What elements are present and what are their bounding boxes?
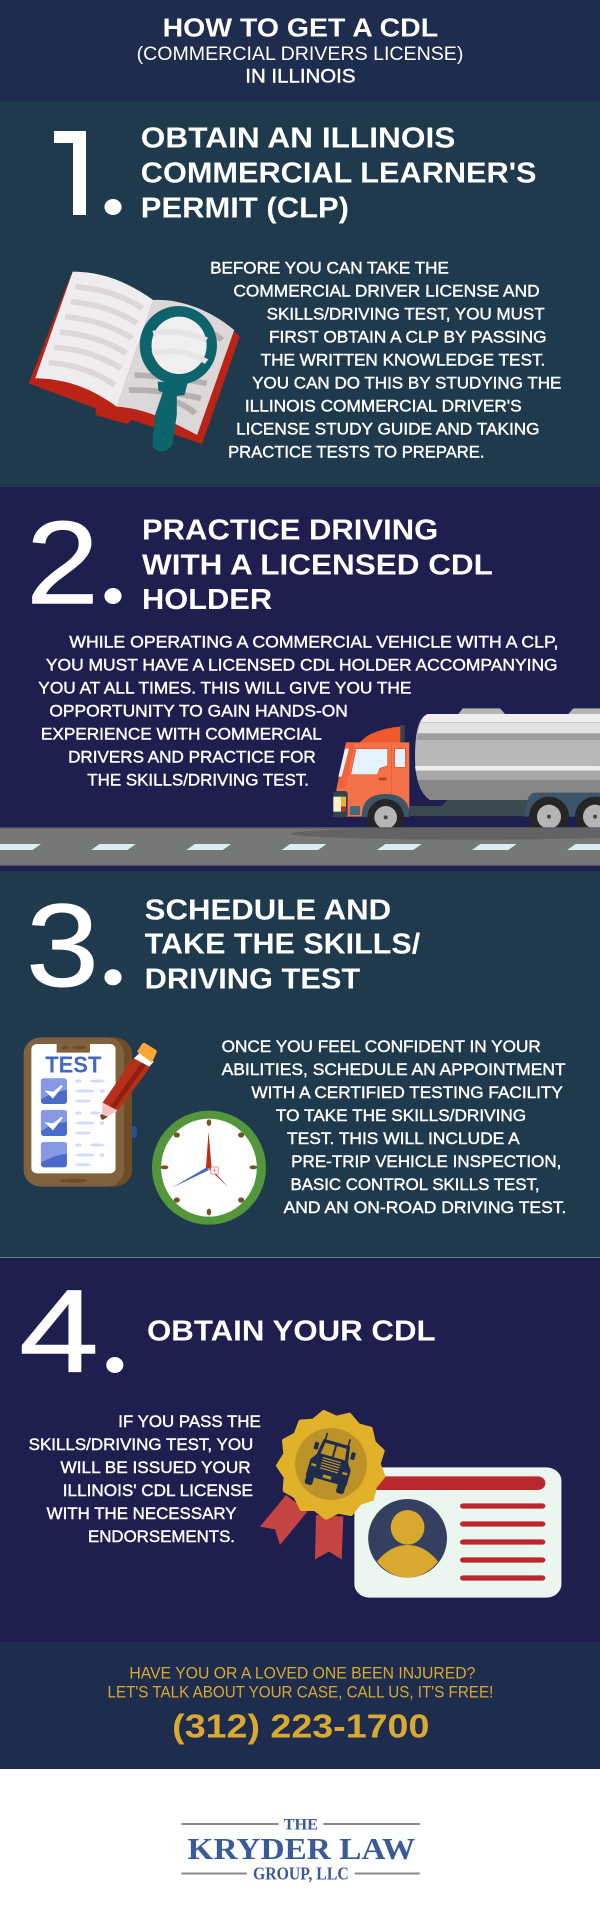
- step 2 body text: [38, 634, 558, 790]
- step 2 heading: PRACTICE DRIVING: [142, 514, 438, 546]
- step 4 body text: ENDORSEMENTS.: [88, 1528, 235, 1546]
- step 1 body text: LICENSE STUDY GUIDE AND TAKING: [236, 420, 540, 438]
- step 1 heading: [141, 123, 537, 224]
- clipboard label: TEST: [45, 1052, 101, 1078]
- step 2 body text: THE SKILLS/DRIVING TEST.: [87, 772, 309, 790]
- step 3 body text: ONCE YOU FEEL CONFIDENT IN YOUR: [222, 1038, 541, 1056]
- step 3 body text: AND AN ON-ROAD DRIVING TEST.: [284, 1199, 566, 1217]
- step 1 body text: FIRST OBTAIN A CLP BY PASSING: [269, 328, 546, 346]
- step 1 body text: ILLINOIS COMMERCIAL DRIVER'S: [245, 397, 522, 415]
- step 2 body text: YOU MUST HAVE A LICENSED CDL HOLDER ACCOMPANYING: [46, 657, 558, 675]
- step 4 body text: WITH THE NECESSARY: [47, 1505, 237, 1523]
- icon: license card: [354, 1467, 561, 1598]
- step 3 heading: [145, 894, 420, 995]
- step 4 body text: SKILLS/DRIVING TEST, YOU: [29, 1436, 253, 1454]
- call to action text: [108, 1664, 493, 1701]
- step 1 body text: SKILLS/DRIVING TEST, YOU MUST: [267, 305, 545, 323]
- step 2 heading: [142, 514, 493, 616]
- panel: step 4: [0, 1258, 600, 1642]
- step 1 heading: COMMERCIAL LEARNER'S: [141, 157, 537, 189]
- step number 1: [54, 131, 86, 215]
- logo: The Kryder Law Group: KRYDER LAW: [188, 1831, 415, 1866]
- step number 4: 4: [19, 1266, 99, 1398]
- step 2 heading: WITH A LICENSED CDL: [142, 549, 493, 581]
- phone number: (312) 223-1700: [172, 1707, 429, 1744]
- panel: call to action: [0, 1642, 600, 1769]
- panel: step 3: [0, 871, 600, 1258]
- step 3 body text: TEST. THIS WILL INCLUDE A: [287, 1130, 520, 1148]
- step 4 body text: IF YOU PASS THE: [118, 1413, 261, 1431]
- call to action text: HAVE YOU OR A LOVED ONE BEEN INJURED?: [129, 1664, 475, 1682]
- step number 2: 2: [26, 497, 99, 629]
- step 3 heading: DRIVING TEST: [145, 963, 361, 995]
- logo: The Kryder Law Group: [181, 1816, 420, 1883]
- icon: open book with magnifying glass: [29, 272, 240, 452]
- step 3 body text: ABILITIES, SCHEDULE AN APPOINTMENT: [222, 1061, 566, 1079]
- icon: award seal with truck: [260, 1412, 383, 1559]
- step 1 body text: BEFORE YOU CAN TAKE THE: [210, 259, 449, 277]
- step 1 body text: PRACTICE TESTS TO PREPARE.: [228, 443, 484, 461]
- step 3 heading: SCHEDULE AND: [145, 894, 391, 926]
- step 2 body text: DRIVERS AND PRACTICE FOR: [68, 749, 316, 767]
- step 1 heading: OBTAIN AN ILLINOIS: [141, 123, 455, 155]
- step 1 body text: THE WRITTEN KNOWLEDGE TEST.: [261, 351, 545, 369]
- step 2 heading: HOLDER: [142, 584, 272, 616]
- step number 3: 3: [26, 880, 99, 1012]
- panel: step 1: [0, 101, 600, 487]
- number dot: [104, 969, 122, 985]
- step 3 body text: WITH A CERTIFIED TESTING FACILITY: [251, 1084, 563, 1102]
- logo: The Kryder Law Group: THE: [284, 1816, 318, 1833]
- number dot: [104, 199, 122, 215]
- title: HOW TO GET A CDL: [163, 13, 438, 43]
- step 1 body text: YOU CAN DO THIS BY STUDYING THE: [252, 374, 561, 392]
- step 3 heading: TAKE THE SKILLS/: [145, 928, 420, 960]
- step 4 heading: OBTAIN YOUR CDL: [147, 1315, 436, 1347]
- icon: tanker truck: [333, 708, 600, 837]
- step 2 body text: OPPORTUNITY TO GAIN HANDS-ON: [49, 703, 348, 721]
- step 2 body text: YOU AT ALL TIMES. THIS WILL GIVE YOU THE: [38, 680, 411, 698]
- step 1 body text: [210, 259, 561, 461]
- step number 1: 1: [40, 109, 120, 241]
- step 2 body text: EXPERIENCE WITH COMMERCIAL: [41, 726, 322, 744]
- step 4 body text: [29, 1413, 261, 1546]
- panel: header: [0, 0, 600, 101]
- number dot: [106, 1357, 123, 1373]
- icon: test clipboard with pencil: [24, 1037, 157, 1187]
- step 2 body text: WHILE OPERATING A COMMERCIAL VEHICLE WITH A CLP,: [69, 634, 558, 652]
- step 1 heading: PERMIT (CLP): [141, 192, 349, 224]
- road: [0, 827, 600, 866]
- step 3 body text: PRE-TRIP VEHICLE INSPECTION,: [291, 1153, 561, 1171]
- panel: step 2: [0, 487, 600, 871]
- subtitle: (COMMERCIAL DRIVERS LICENSE): [137, 43, 463, 65]
- step 3 body text: TO TAKE THE SKILLS/DRIVING: [276, 1107, 526, 1125]
- logo: The Kryder Law Group: GROUP, LLC: [253, 1863, 349, 1883]
- number dot: [104, 588, 122, 604]
- step 4 body text: WILL BE ISSUED YOUR: [60, 1459, 251, 1477]
- step 3 body text: BASIC CONTROL SKILLS TEST,: [290, 1176, 540, 1194]
- step 1 body text: COMMERCIAL DRIVER LICENSE AND: [233, 282, 540, 300]
- call to action text: LET'S TALK ABOUT YOUR CASE, CALL US, IT'S FREE!: [108, 1683, 493, 1701]
- step 4 body text: ILLINOIS' CDL LICENSE: [63, 1482, 253, 1500]
- step 3 body text: [222, 1038, 566, 1217]
- icon: clock: [152, 1111, 266, 1225]
- subtitle location: IN ILLINOIS: [245, 67, 356, 88]
